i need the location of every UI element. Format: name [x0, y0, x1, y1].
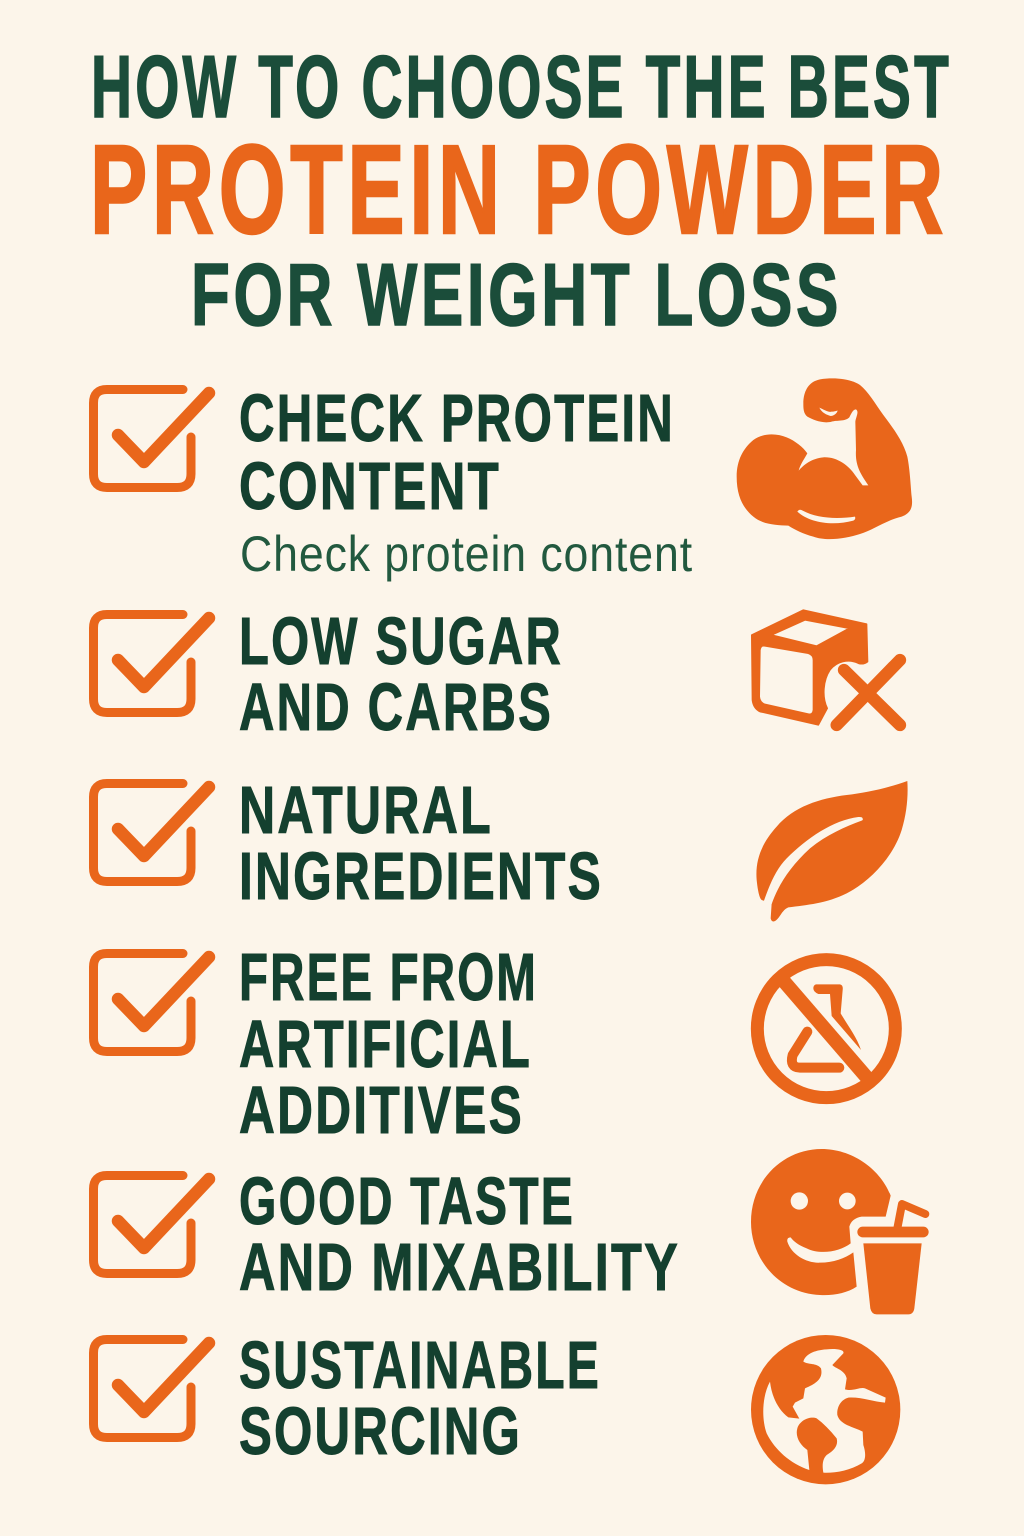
title — [90, 37, 952, 344]
item 2 heading: low sugar and carbs: LOW SUGAR — [239, 604, 563, 679]
item 2 heading: low sugar and carbs — [239, 604, 563, 745]
item 1 heading: check protein content: CONTENT — [239, 449, 501, 524]
item 6 heading: sustainable sourcing: SOURCING — [239, 1394, 522, 1469]
item 1 heading: check protein content — [239, 381, 675, 524]
item 5 heading: good taste and mixability: GOOD TASTE — [239, 1164, 575, 1239]
icon: checkbox 4 — [94, 954, 209, 1052]
icon: flexed bicep — [737, 378, 912, 539]
item 4 heading: free from artificial additives: ARTIFICIAL — [239, 1007, 532, 1082]
icon: checkbox 2 — [94, 614, 209, 712]
item 1 subtext: Check protein content — [240, 526, 693, 582]
item 4 heading: free from artificial additives — [239, 940, 538, 1148]
icon: checkbox 5 — [94, 1176, 209, 1274]
icon: smiling face with drink — [751, 1149, 925, 1314]
icon: checkbox 3 — [94, 784, 209, 882]
icon: sugar cube with x — [752, 610, 900, 725]
icon: globe — [751, 1335, 900, 1484]
item 5 heading: good taste and mixability: AND MIXABILITY — [239, 1230, 680, 1305]
item 3 heading: natural ingredients — [239, 773, 603, 914]
icon: leaf — [756, 781, 908, 921]
item 4 heading: free from artificial additives: ADDITIVES — [239, 1073, 524, 1148]
item 4 heading: free from artificial additives: FREE FROM — [239, 940, 538, 1015]
item 1 heading: check protein content: CHECK PROTEIN — [239, 381, 675, 456]
item 3 heading: natural ingredients: INGREDIENTS — [239, 839, 603, 914]
item 6 heading: sustainable sourcing: SUSTAINABLE — [239, 1328, 601, 1403]
icon: checkbox 6 — [94, 1340, 209, 1438]
item 5 heading: good taste and mixability — [239, 1164, 680, 1305]
item 2 heading: low sugar and carbs: AND CARBS — [239, 670, 553, 745]
icon: crossed-out flask — [757, 960, 895, 1098]
item 6 heading: sustainable sourcing — [239, 1328, 601, 1469]
item 3 heading: natural ingredients: NATURAL — [239, 773, 493, 848]
icon: checkbox 1 — [94, 390, 209, 488]
